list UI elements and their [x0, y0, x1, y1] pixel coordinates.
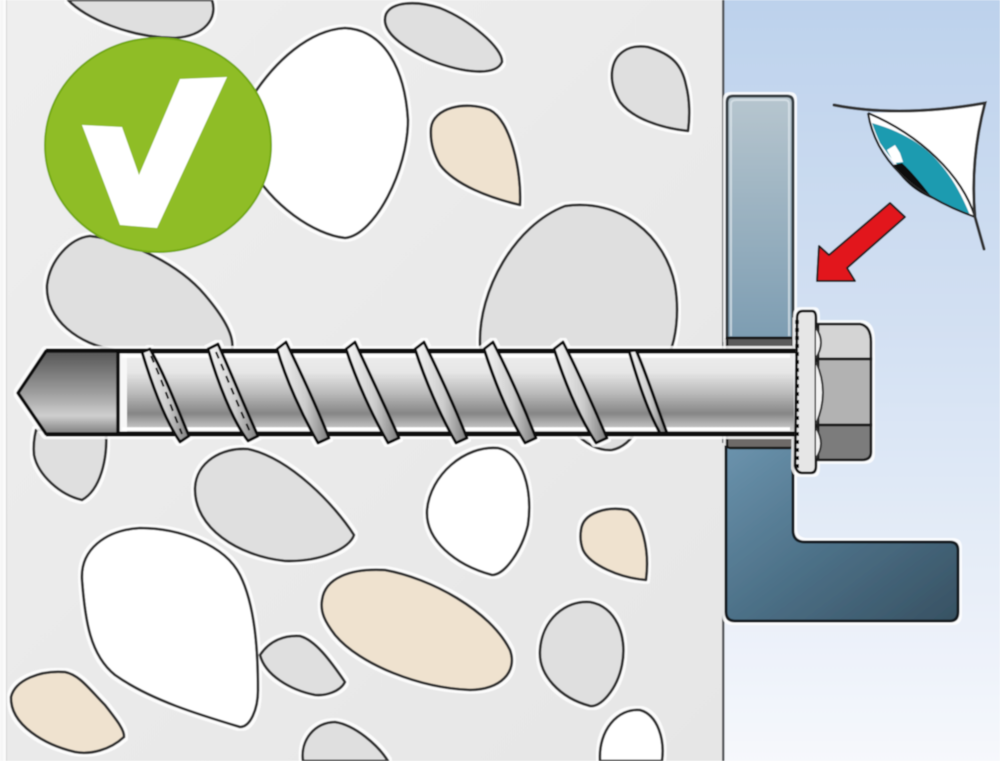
bracket lower leg	[726, 447, 958, 621]
bracket upper leg	[727, 96, 793, 338]
gap shading: above bolt	[727, 338, 793, 352]
stone: large white	[250, 28, 408, 238]
bracket upper inner highlight	[731, 100, 789, 336]
hex head middle facet	[818, 359, 871, 425]
hole clearance gap	[724, 338, 794, 450]
icon: white check mark	[82, 77, 227, 228]
stone: bottom white	[600, 710, 663, 761]
hex head top facet	[818, 324, 871, 359]
stone: lower right grey	[540, 602, 623, 706]
stone: lower grey	[195, 449, 354, 561]
eyelashes	[834, 103, 985, 249]
stone: bottom grey	[303, 722, 388, 761]
shaft outline	[46, 351, 796, 434]
screw threads	[142, 342, 667, 443]
stone: small grey lower middle	[260, 636, 345, 695]
eye pupil	[893, 163, 933, 199]
green check badge	[45, 38, 271, 252]
stone: top centre grey	[385, 3, 502, 72]
stone: lower white centre	[427, 448, 529, 575]
washer	[795, 311, 816, 473]
thread damage marks	[151, 352, 251, 434]
washer serration	[795, 320, 799, 468]
stone: top left grey	[68, 0, 213, 38]
background: sky area	[724, 0, 1000, 761]
eye white	[868, 103, 985, 217]
hex head bottom facet	[818, 425, 871, 460]
steel angle bracket	[726, 96, 958, 621]
gap shading: below bolt	[727, 432, 793, 448]
stone: large white lower left	[82, 528, 258, 727]
stone: top right grey	[612, 46, 689, 131]
flange curves	[816, 328, 823, 458]
stone: beige upper	[431, 106, 520, 205]
stone: left grey	[47, 236, 232, 350]
stone: beige large oval	[322, 570, 512, 690]
screw tip	[18, 351, 118, 434]
eye lid outline	[868, 113, 975, 217]
stone: small under tip	[34, 430, 106, 500]
stone: centre grey behind bolt	[480, 205, 677, 352]
eye glint	[887, 145, 903, 163]
eye iris	[872, 123, 970, 215]
shaft white band behind tip	[119, 353, 127, 432]
icon: eye	[834, 103, 985, 249]
screw shaft	[118, 352, 794, 433]
arrow: red pointing to fastening	[817, 203, 905, 281]
stone: beige small right	[580, 509, 647, 580]
stone: lower tail of centre grey	[573, 430, 636, 450]
shaft white inner edges	[122, 356, 790, 429]
stone: beige lower left	[11, 672, 124, 753]
aggregate stones in concrete	[11, 0, 689, 761]
panel: concrete wall	[0, 0, 724, 761]
screw anchor	[18, 311, 871, 473]
